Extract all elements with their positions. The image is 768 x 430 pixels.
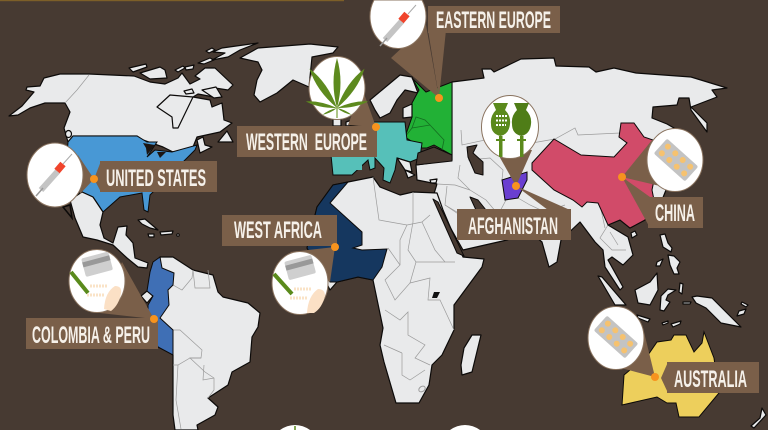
icon circle: cropped bottom left — [280, 425, 310, 430]
label box: United States — [100, 161, 217, 192]
label: United States: UNITED STATES — [106, 165, 206, 192]
land: Britain — [333, 119, 358, 126]
land: Australia — [622, 332, 719, 417]
icon circle: razor and powder — [272, 252, 328, 314]
callout: Australia — [588, 306, 759, 393]
marker: Eastern Europe — [435, 94, 443, 102]
icon circle: poppy — [482, 96, 538, 158]
icon circle: pills — [647, 128, 703, 192]
icon circle: cannabis — [309, 56, 365, 120]
icon: syringe — [36, 154, 72, 196]
land: Central America — [70, 192, 148, 268]
marker: Western Europe — [372, 123, 380, 131]
pointer: Australia label — [661, 362, 668, 393]
pointer: United States label — [94, 161, 101, 192]
icon: razor and powder — [71, 251, 121, 311]
pointer: United States — [78, 155, 94, 194]
icon circle: razor and powder — [69, 250, 125, 312]
icon circle: syringe — [370, 0, 426, 48]
land: Afghanistan — [502, 172, 527, 200]
callout: United States — [27, 143, 217, 207]
land: Caribbean — [138, 219, 179, 237]
land: West Africa — [307, 182, 387, 282]
marker: China — [618, 173, 626, 181]
land: Greenland — [240, 44, 338, 102]
callout: Afghanistan — [457, 96, 571, 240]
icon: syringe — [380, 5, 416, 46]
land: Africa — [307, 177, 484, 403]
pointer: China label — [622, 177, 650, 228]
land: North America — [9, 43, 258, 153]
pointer: West Africa — [290, 247, 335, 282]
icon: pill blister — [654, 139, 698, 181]
pointer: China icon — [622, 140, 660, 186]
land: South America — [141, 257, 260, 430]
land: New Zealand — [751, 408, 766, 428]
label: Afghanistan: AFGHANISTAN — [468, 213, 558, 240]
land: Western Europe — [331, 122, 422, 183]
land: Papua New Guinea — [692, 296, 741, 327]
marker: Afghanistan — [512, 182, 520, 190]
land: Philippines — [656, 234, 680, 274]
land: United States — [65, 136, 197, 212]
marker: West Africa — [331, 243, 339, 251]
label box: Colombia and Peru — [26, 318, 158, 349]
icon circle: syringe — [27, 143, 83, 207]
land: Scandinavia — [370, 75, 418, 118]
icon circle: cropped bottom right — [450, 425, 480, 430]
callout: West Africa — [222, 215, 339, 314]
marker: Australia — [651, 373, 659, 381]
label box: Eastern Europe — [428, 6, 560, 33]
icon circle: pills — [588, 306, 644, 370]
callout: Western Europe — [237, 56, 380, 157]
label box: West Africa — [222, 215, 337, 246]
label box: Afghanistan — [457, 209, 571, 240]
marker: Colombia and Peru — [150, 315, 158, 323]
pointer: Colombia and Peru — [100, 262, 154, 319]
label box: China — [648, 197, 703, 228]
callout: China — [618, 128, 703, 228]
pointer: Western Europe — [348, 88, 376, 127]
icon: razor and powder — [274, 255, 325, 313]
land: Eurasia — [416, 58, 727, 290]
icon: pill blister — [594, 316, 638, 358]
label: Western Europe: WESTERN EUROPE — [246, 129, 367, 156]
land: Eastern Europe — [405, 78, 452, 155]
pointer: Afghanistan icon — [494, 147, 532, 186]
icon: cannabis leaf — [305, 58, 369, 118]
label box: Western Europe — [237, 126, 377, 157]
pointer: Afghanistan label — [516, 186, 570, 210]
label: China: CHINA — [655, 200, 695, 227]
seas — [416, 145, 486, 256]
great lakes — [143, 143, 155, 155]
callout: Eastern Europe — [370, 0, 560, 102]
pointer: Eastern Europe icon — [391, 25, 439, 98]
land: Baltic — [403, 104, 412, 118]
land: Cyprus — [430, 179, 437, 183]
pointer: Eastern Europe — [428, 30, 446, 98]
label: Colombia and Peru: COLOMBIA & PERU — [32, 322, 150, 349]
callout: Colombia and Peru — [26, 250, 158, 349]
label: West Africa: WEST AFRICA — [234, 217, 322, 244]
icon: poppy pods — [491, 103, 531, 157]
land: Mediterranean islands — [356, 158, 415, 178]
land: Indonesia — [598, 273, 691, 327]
land: Madagascar — [461, 335, 481, 375]
land: China — [532, 123, 662, 228]
land: Hainan — [631, 231, 637, 238]
marker: United States — [90, 175, 98, 183]
label: Eastern Europe: EASTERN EUROPE — [436, 7, 551, 34]
label box: Australia — [667, 362, 759, 393]
pointer: Australia icon — [621, 332, 655, 377]
land: Colombia and Peru — [147, 257, 174, 355]
